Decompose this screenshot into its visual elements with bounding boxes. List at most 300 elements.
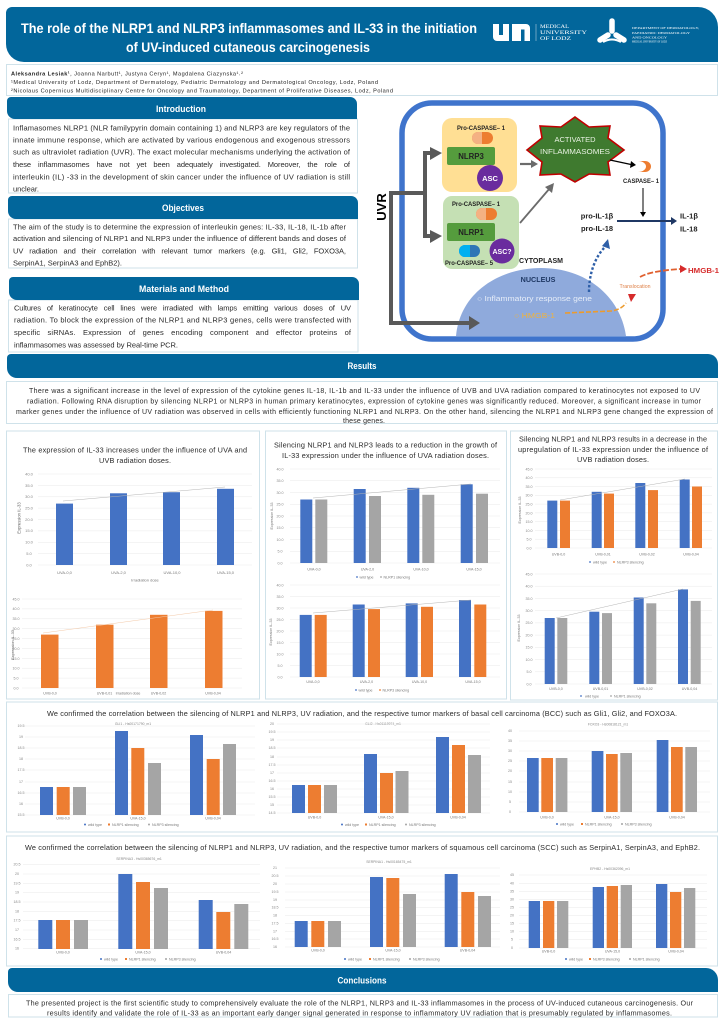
text: objectives: SerpinA1, SerpinA3 and EphB2). (13, 258, 122, 268)
bar chart: SERPINA3: UVB-0,0 (56, 950, 70, 954)
bar chart: EPHB2: UVA-15,0 (605, 950, 620, 954)
bar chart: SERPINA3: 18 (15, 909, 19, 913)
bar chart: UVB doses: 35.0 (12, 617, 20, 621)
bar chart: SERPINA1: 20 (273, 882, 277, 886)
bar chart: SERPINA3: 19 (15, 891, 19, 895)
legend (344, 957, 440, 961)
results text: marker genes under the influence of UV radiation was observed in cells with efficiently functioning NLRP1 and NLRP3. On the other hand, silencing the NLRP1 and NLRP3 gene changed the expression of (16, 409, 713, 416)
bar chart: SERPINA1: 16.5 (272, 937, 278, 941)
bar chart: UVB doses (10, 598, 242, 696)
arrow: star to caspase (610, 160, 636, 168)
bar chart: UVA doses: 10.0 (25, 540, 34, 544)
arrow: HMGB-1 translocation: Translocation (620, 284, 651, 290)
legend: wild type (358, 688, 372, 692)
bar chart: UVB doses: Expression IL-33 (10, 629, 15, 660)
bar chart: UVB NLRP1 silencing: 15.0 (526, 646, 532, 650)
panel title: The expression of IL-33 increases under the influence of UVA and (23, 446, 247, 454)
bar chart: UVA NLRP1 silencing (270, 468, 500, 579)
panel title (23, 446, 247, 465)
bar chart: UVA NLRP1 silencing: UVA-15,0 (466, 568, 482, 572)
bar chart: UVA NLRP3 silencing: 35.0 (276, 595, 284, 599)
bar chart: GLI2: 19 (270, 738, 274, 742)
bar chart: UVA doses: 20.0 (25, 517, 34, 522)
bar chart: UVA NLRP3 silencing: 25.0 (276, 618, 284, 622)
bar chart: SERPINA3 (14, 857, 260, 961)
legend: NLRP3 silencing (617, 560, 644, 564)
bar chart: UVA NLRP3 silencing: 5.0 (278, 664, 282, 668)
legend: wild type (585, 694, 599, 698)
bar chart: UVB doses: 45.0 (12, 598, 20, 602)
NLRP1 complex: ASC? (492, 249, 512, 256)
NLRP3 complex (442, 118, 517, 192)
bar chart: EPHB2 (510, 867, 707, 961)
panel title: IL-33 expression under the influence of UVA radiation doses. (282, 451, 489, 460)
bar chart: UVB doses: 30.0 (12, 627, 20, 631)
activated inflammasomes star: ACTIVATED (554, 135, 596, 144)
legend (356, 575, 410, 579)
legend: NLRP3 silencing (593, 957, 620, 961)
bar chart: UVA NLRP3 silencing: 15.0 (276, 641, 284, 645)
title (21, 20, 477, 55)
bar chart: GLI1: 15.5 (18, 813, 24, 817)
bar chart: SERPINA1: 18.5 (272, 906, 278, 910)
pro-interleukins (581, 212, 614, 233)
bar chart: UVB doses: 25.0 (12, 637, 20, 641)
label: UVR: UVR (374, 193, 389, 221)
bar chart: SERPINA1: UVB-0,0 (311, 948, 325, 952)
nucleus: ○ HMGB-1 (514, 313, 555, 320)
bar chart: FOXO3: UVB-0,0 (540, 816, 554, 820)
bar chart: SERPINA3: UVA-15,0 (135, 950, 151, 954)
bar chart: GLI2: 17.5 (268, 763, 276, 767)
bar chart: UVA NLRP1 silencing: 10.0 (276, 538, 284, 542)
arrow: HMGB-1 release: HMGB-1 (688, 266, 719, 275)
authors and affiliations: ²Nicolaus Copernicus Multidisciplinary Centre for Oncology and Traumatology, Department of Proliferative Diseases, Lodz, Poland (11, 88, 393, 94)
bar chart: GLI2: 15.5 (268, 795, 276, 799)
legend: wild type (360, 575, 373, 579)
panel: objectives (8, 196, 358, 268)
arrow: HMGB-1 translocation (565, 284, 651, 313)
text: introduction: these inflammasomes have not yet been adequately investigated. Moreover, the role of (13, 160, 351, 169)
legend: NLRP3 silencing (382, 688, 409, 692)
panel title: We confirmed the correlation between the silencing of NLRP1 and NLRP3, UV radiation, and the respective tumor markers of squamous cell carcinoma (SCC) such as SerpinA1, SerpinA3, and EphB2. (25, 843, 700, 852)
bar chart: GLI2: UVB-0,04 (450, 816, 466, 820)
NLRP3 complex: ASC (482, 174, 498, 183)
bar chart: SERPINA3: 17 (15, 928, 19, 932)
bar chart: UVB NLRP3 silencing: Expression IL-33 (518, 497, 522, 523)
conclusions text: The presented project is the first scientific study to comprehensively evaluate the role of the NLRP1, NLRP3 and IL-33 inflammasomes in the process of UV-induced cutaneous carcinogenesis. Our (26, 998, 694, 1008)
legend (589, 560, 644, 564)
bar chart: SERPINA1: 18 (273, 914, 277, 918)
bar chart: SERPINA1: 19 (273, 898, 277, 902)
results text (6, 382, 718, 425)
bar chart: GLI1: 19.5 (18, 724, 24, 728)
bar chart: UVA doses: 15.0 (25, 528, 34, 533)
legend: NLRP3 silencing (413, 957, 440, 961)
bar chart: SERPINA3: 16.5 (14, 937, 20, 941)
bar chart: UVA doses: UVA-2,0 (111, 570, 127, 575)
legend: wild type (88, 823, 102, 827)
bar chart: UVA doses: 40.0 (25, 472, 34, 476)
text: objectives: UV radiation and their correlation with relevant tumor markers (e.g. Gli1, Gli2, FOXO3A, (13, 246, 346, 256)
bar chart: GLI1: 18.5 (18, 746, 24, 750)
bar chart: UVA NLRP1 silencing: 40.0 (276, 468, 284, 472)
authors and affiliations: Aleksandra Lesiak¹, Joanna Narbutt¹, Justyna Ceryn¹, Magdalena Ciazynska¹˒² (11, 70, 243, 78)
bar chart: UVA NLRP1 silencing: 15.0 (276, 526, 284, 530)
bar chart: UVA doses: 0.0 (26, 562, 33, 568)
bar chart: GLI1: 18 (19, 757, 23, 761)
text: materials and method: Cultures of keratinocyte cell lines were irradiated with lamps emitting various doses of UV (14, 304, 351, 312)
authors and affiliations (6, 64, 718, 96)
activated inflammasomes star (527, 117, 624, 182)
panel title: UVB radiation doses. (577, 455, 649, 464)
bar chart: UVA NLRP3 silencing: 0.0 (278, 676, 282, 680)
header banner (6, 7, 718, 62)
logo: department: DEPARTMENT OF DERMATOLOGY, (632, 26, 699, 31)
bar chart: SERPINA3: 18.5 (14, 900, 20, 904)
bar chart: EPHB2: 30 (510, 897, 514, 901)
bar chart: GLI1: UVA-15,0 (130, 816, 146, 820)
text: introduction: such as ultraviolet radiation (UVR). The exact molecular mechanisms underlying the activation of (13, 148, 351, 156)
text: introduction: interleukin (IL) -33 in the development of skin cancer under the influence of UV radiation is still (13, 172, 350, 182)
bar chart: UVB doses: Irradiation dose (116, 692, 140, 696)
bar chart: UVB NLRP3 silencing: UVB-0,01 (595, 552, 611, 556)
bar chart: FOXO3: UVB-0,04 (669, 816, 685, 820)
logo: Medical University of Lodz: UNIVERSITY (540, 30, 587, 36)
bar chart: UVB doses: 15.0 (12, 657, 20, 661)
bar chart: UVA doses: 30.0 (25, 494, 34, 499)
conclusions text: results identify and validate the role of IL-33 as an important early danger signal generated in response to inflammatory UV radiation that is presumably regulated by inflammasomes. (47, 1008, 672, 1018)
bar chart: UVA doses (16, 472, 252, 582)
legend: wild type (593, 560, 607, 564)
bar chart: GLI1: UVB-0,0 (56, 816, 70, 820)
bar chart: UVB NLRP3 silencing: 25.0 (526, 502, 532, 506)
bar chart: UVA NLRP3 silencing: UVA-10,0 (412, 680, 427, 684)
panel title: Silencing NLRP1 and NLRP3 leads to a reduction in the growth of (274, 440, 498, 450)
bar chart: UVB doses: UVB-0,0 (43, 692, 57, 696)
text: introduction: unclear. (13, 184, 39, 194)
mature interleukins: IL-1β (680, 212, 698, 220)
panel: silencing UVA (266, 431, 506, 699)
results text: these genes. (343, 418, 385, 425)
panel title (274, 440, 498, 460)
bar chart: UVA doses: Irradiation dose (131, 578, 160, 582)
NLRP3 complex: NLRP3 (458, 152, 484, 161)
bar chart: UVB NLRP1 silencing: 10.0 (526, 658, 532, 662)
title: The role of the NLRP1 and NLRP3 inflammasomes and IL-33 in the initiation (21, 20, 477, 36)
legend: wild type (348, 957, 362, 961)
bar chart: SERPINA1: 19.5 (272, 890, 278, 894)
bar chart: SERPINA3: 16 (15, 947, 19, 951)
bar chart: GLI1: 17 (19, 780, 23, 784)
bar chart: UVB NLRP1 silencing: 40.0 (526, 584, 532, 588)
bar chart: UVB NLRP3 silencing: UVB-0,0 (552, 552, 565, 556)
authors and affiliations: ¹Medical University of Lodz, Department of Dermatology, Pediatric Dermatology and Dermatological Oncology, Lodz, Poland (11, 80, 378, 86)
pathway diagram (374, 103, 719, 339)
bar chart: UVB NLRP1 silencing: UVB-0,04 (682, 687, 697, 691)
bar chart: SERPINA3: 19.5 (14, 881, 20, 885)
bar chart: EPHB2: 0 (511, 946, 513, 950)
bar chart: SERPINA1: SERPINA1 - Hs00165475_m1 (366, 860, 412, 864)
bar chart: UVA doses: UVA-15,0 (217, 570, 235, 575)
bar chart: SERPINA1 (272, 860, 500, 961)
bar chart: UVB NLRP3 silencing: 40.0 (526, 476, 532, 480)
legend: NLRP1 silencing (614, 694, 641, 698)
caspase-1 (623, 161, 660, 185)
pro-interleukins: pro-IL-1β (581, 212, 614, 220)
bar chart: UVB doses: 10.0 (12, 666, 20, 670)
bar chart: UVB NLRP3 silencing: 20.0 (526, 512, 532, 516)
bar chart: GLI2: 18 (270, 755, 274, 759)
arrow: NLRP3 to star (520, 160, 538, 168)
bar chart: GLI2: 19.5 (268, 730, 276, 734)
bar chart: EPHB2: 35 (510, 889, 514, 893)
bar chart: UVB doses: UVB-0,04 (205, 692, 221, 696)
bar chart: GLI2: 16 (270, 787, 274, 791)
bar chart: UVA NLRP1 silencing: 25.0 (276, 502, 284, 506)
panel: BCC tumor markers (6, 702, 718, 832)
panel: IL-33 UVA and UVB (6, 431, 260, 699)
bar chart: UVA NLRP1 silencing: 0.0 (278, 562, 282, 566)
pro-interleukins: pro-IL-18 (581, 224, 613, 233)
bar chart: UVA doses: 25.0 (25, 506, 34, 510)
legend: wild type (560, 822, 574, 826)
text: introduction: Inflamasomes NLRP1 (NLR familypyrin domain containing 1) and NLRP3 are key regulators of the (13, 124, 350, 132)
bar chart: UVA NLRP3 silencing: 20.0 (276, 630, 284, 634)
bar chart: GLI2: 20 (270, 722, 274, 726)
heading: introduction (7, 97, 357, 119)
bar chart: GLI2: GLI2 - Hs01119974_m1 (365, 722, 401, 726)
text: materials and method: inflammasomes was assessed by Real-time PCR. (14, 340, 178, 350)
panel: materials and method (8, 277, 359, 352)
arrow: dotted gene to pro-IL (589, 239, 610, 292)
bar chart: GLI2 (268, 722, 490, 827)
legend: wild type (569, 957, 583, 961)
logo: Medical University of Lodz: OF LODZ (540, 36, 571, 42)
bar chart: EPHB2: UVB-0,04 (668, 950, 684, 954)
bar chart: SERPINA3: 20 (15, 872, 19, 876)
legend: NLRP3 silencing (152, 823, 179, 827)
bar chart: EPHB2: 20 (510, 914, 514, 918)
bar chart: GLI2: 17 (270, 771, 274, 775)
bar chart: UVB NLRP1 silencing: UVB-0,0 (549, 687, 563, 691)
panel title (518, 434, 709, 464)
conclusions banner (8, 968, 718, 992)
bar chart: UVB NLRP1 silencing: UVB-0,01 (593, 687, 608, 691)
bar chart: GLI2: 16.5 (268, 779, 276, 783)
mature interleukins (680, 212, 698, 234)
conclusions text (8, 994, 718, 1018)
mature interleukins: IL-18 (680, 224, 698, 234)
bar chart: UVA NLRP1 silencing: 20.0 (276, 514, 284, 518)
bar chart: SERPINA1: 20.5 (272, 874, 278, 878)
logo: department: AND ONCOLOGY (632, 36, 668, 40)
bar chart: GLI1: UVB-0,04 (205, 816, 221, 820)
results banner (7, 354, 718, 378)
bar chart: EPHB2: UVB-0,0 (542, 950, 555, 954)
bar chart: UVB NLRP3 silencing: 45.0 (526, 468, 532, 472)
text: objectives: The aim of the study is to determine the expression of interleukin genes: IL-33, IL-18, IL-1b after (13, 222, 346, 232)
bar chart: UVB doses: 5.0 (14, 676, 18, 680)
text: materials and method (14, 304, 352, 350)
bar chart: GLI1: GLI1 - Hs00171790_m1 (115, 722, 151, 726)
bar chart: SERPINA3: UVB-0,04 (216, 950, 231, 954)
bar chart: GLI1: 19 (19, 735, 23, 739)
bar chart: UVB NLRP1 silencing: Expression IL-33 (517, 615, 521, 641)
bar chart: UVB NLRP3 silencing: UVB-0,02 (639, 552, 655, 556)
legend: NLRP1 silencing (129, 957, 156, 961)
legend (556, 822, 652, 826)
bar chart: UVB NLRP1 silencing: 20.0 (526, 634, 532, 638)
bar chart: GLI1: 16 (19, 802, 23, 806)
legend (84, 823, 179, 827)
bar chart: UVB NLRP1 silencing: 45.0 (526, 572, 532, 576)
logo: Medical University of Lodz (493, 24, 587, 42)
bar chart: FOXO3: 15 (508, 780, 512, 784)
bar chart: GLI2: UVA-15,0 (378, 816, 394, 820)
activated inflammasomes star: INFLAMMASOMES (540, 147, 610, 156)
NLRP1 complex: Pro-CASPASE– 5 (445, 260, 494, 267)
bar chart: EPHB2: 10 (510, 930, 514, 934)
bar chart: UVA NLRP1 silencing: UVA-0,0 (307, 568, 321, 572)
bar chart: SERPINA1: 21 (273, 866, 277, 870)
legend: wild type (104, 957, 118, 961)
heading: materials and method (9, 277, 359, 300)
bar chart: UVA NLRP3 silencing: Expression IL-33 (269, 619, 273, 645)
bar chart: EPHB2: 45 (510, 873, 514, 877)
bar chart: EPHB2: 25 (510, 905, 514, 909)
bar chart: UVA doses: Expression IL-33 (16, 502, 22, 534)
bar chart: UVA NLRP3 silencing: UVA-0,0 (306, 680, 320, 684)
bar chart: FOXO3: 20 (508, 769, 512, 773)
legend: NLRP1 silencing (369, 823, 396, 827)
bar chart: UVB doses: 40.0 (12, 607, 20, 611)
legend: wild type (345, 823, 359, 827)
text: introduction: innate immune response, which are activated by various endogenous and exogenous stressors (13, 136, 350, 144)
bar chart: EPHB2: 40 (510, 881, 514, 885)
panel title: UVB radiation doses. (99, 456, 171, 465)
logo: department: MEDICAL UNIVERSITY OF LODZ (632, 40, 667, 44)
bar chart: UVB doses: 20.0 (12, 647, 20, 651)
panel title: Silencing NLRP1 and NLRP3 results in a decrease in the (519, 434, 707, 444)
bar chart: UVA NLRP1 silencing: 35.0 (276, 479, 284, 483)
text: materials and method: specific siRNAs. Expression of genes encoding component and effector proteins of (14, 328, 352, 337)
bar chart: FOXO3: 35 (508, 739, 512, 743)
bar chart: UVB NLRP3 silencing: 10.0 (526, 529, 532, 533)
bar chart: UVB doses: UVB-0,01 (97, 692, 112, 696)
bar chart: UVA NLRP3 silencing: UVA-15,0 (465, 680, 481, 684)
bar chart: UVB NLRP1 silencing: 35.0 (526, 597, 532, 601)
bar chart: SERPINA1: 17.5 (272, 922, 278, 926)
bar chart: SERPINA3: 20.5 (14, 863, 20, 867)
legend: NLRP3 silencing (409, 823, 436, 827)
bar chart: UVB NLRP3 silencing: 35.0 (526, 485, 532, 489)
panel title: We confirmed the correlation between the silencing of NLRP1 and NLRP3, UV radiation, and the respective tumor markers of basal cell carcinoma (BCC) such as Gli1, Gli2, and FOXO3A. (47, 709, 677, 718)
bar chart: UVB NLRP1 silencing: 25.0 (526, 621, 532, 625)
results text: radiation. Following RNA disruption by silencing NLRP1 or NLRP3 in human primary keratinocytes, expression of cytokine genes was significantly reduced. Moreover, a significant increase in tumor (27, 398, 702, 406)
nucleus (456, 268, 626, 336)
heading: objectives (8, 196, 358, 219)
bar chart: UVA doses: UVA-0,0 (57, 570, 73, 575)
bar chart: FOXO3: 25 (508, 759, 512, 763)
bar chart: UVB NLRP3 silencing: UVB-0,04 (683, 552, 699, 556)
bar chart: SERPINA1: 16 (273, 945, 277, 949)
bar chart: UVB NLRP3 silencing (518, 468, 712, 564)
bar chart: UVB NLRP1 silencing: 0.0 (526, 682, 532, 686)
bar chart: UVB NLRP3 silencing: 30.0 (526, 494, 532, 498)
logo: department (600, 21, 699, 44)
nucleus: ○ Inflammatory response gene (477, 296, 592, 303)
legend: NLRP1 silencing (112, 823, 139, 827)
cell membrane outline (402, 103, 663, 339)
legend (565, 957, 660, 961)
legend: NLRP1 silencing (633, 957, 660, 961)
bar chart: UVB NLRP1 silencing: 5.0 (526, 670, 532, 674)
bar chart: EPHB2: 15 (510, 922, 514, 926)
bar chart: GLI1: 16.5 (18, 791, 24, 795)
bar chart: GLI2: 15 (270, 803, 274, 807)
arrow: HMGB-1 release (640, 265, 719, 277)
NLRP1 complex (443, 196, 519, 269)
title: of UV-induced cutaneous carcinogenesis (126, 39, 370, 55)
bar chart: UVA NLRP3 silencing: 30.0 (276, 606, 284, 610)
panel: SCC tumor markers (6, 836, 718, 966)
bar chart: UVB NLRP3 silencing: 5.0 (526, 538, 532, 542)
heading: objectives: Objectives (162, 203, 204, 213)
bar chart: FOXO3: 40 (508, 729, 512, 733)
label: cytoplasm: CYTOPLASM (519, 258, 563, 265)
legend (341, 823, 436, 827)
bar chart: GLI2: UVB-0,0 (308, 816, 321, 820)
bar chart: EPHB2: 5 (511, 938, 513, 942)
legend: NLRP3 silencing (625, 822, 652, 826)
bar chart: UVA NLRP3 silencing: UVA-2,0 (360, 680, 373, 684)
legend: NLRP1 silencing (373, 957, 400, 961)
NLRP3 complex: Pro-CASPASE– 1 (457, 125, 506, 132)
bar chart: UVA doses: 35.0 (25, 483, 34, 488)
bar chart: GLI1: 17.5 (18, 768, 24, 772)
bar chart: UVA NLRP1 silencing: UVA-10,0 (413, 568, 429, 572)
conclusions banner: Conclusions (338, 976, 386, 986)
results text: There was a significant increase in the level of expression of the cytokine genes IL-18, IL-1b and IL-33 under the influence of UVB and UVA radiation compared to keratinocytes not exposed to UV (29, 388, 700, 395)
bar chart: UVA NLRP1 silencing: 30.0 (276, 491, 284, 495)
bar chart: FOXO3: 30 (508, 749, 512, 753)
bar chart: FOXO3 (508, 722, 710, 826)
bar chart: SERPINA1: 17 (273, 930, 277, 934)
bar chart: UVA NLRP1 silencing: 5.0 (278, 550, 282, 554)
nucleus: NUCLEUS (521, 275, 556, 284)
bar chart: UVB NLRP1 silencing: UVB-0,02 (637, 687, 653, 691)
heading: materials and method: Materials and Method (139, 284, 229, 294)
legend (580, 694, 641, 698)
bar chart: SERPINA3: SERPINA3 - Hs00365676_m1 (116, 857, 162, 861)
logo: department: PAEDIATRIC DERMATOLOGY (632, 31, 691, 35)
bar chart: UVA NLRP1 silencing: UVA-2,0 (361, 568, 374, 572)
bar chart: UVB NLRP3 silencing: 15.0 (526, 520, 532, 524)
bar chart: SERPINA1: UVA-15,0 (385, 948, 401, 952)
caspase-1: CASPASE– 1 (623, 179, 660, 185)
bar chart: UVA NLRP1 silencing: Expression IL-33 (270, 503, 274, 529)
panel: silencing UVB (510, 431, 718, 700)
text: objectives: activation and silencing of NLRP1 and NLRP3 under the influence of different bands and doses of (13, 234, 347, 243)
bar chart: FOXO3: 0 (509, 810, 511, 814)
arrow: maturation (617, 217, 677, 225)
legend (100, 957, 196, 961)
bar chart: GLI1 (18, 722, 255, 827)
panel title: upregulation of IL-33 expression under the influence of (518, 445, 709, 454)
text: materials and method: radiation. To block the expression of the NLRP1 and NLRP3 genes, cells were transfected with (14, 316, 351, 324)
arrow: caspase down (640, 188, 646, 217)
